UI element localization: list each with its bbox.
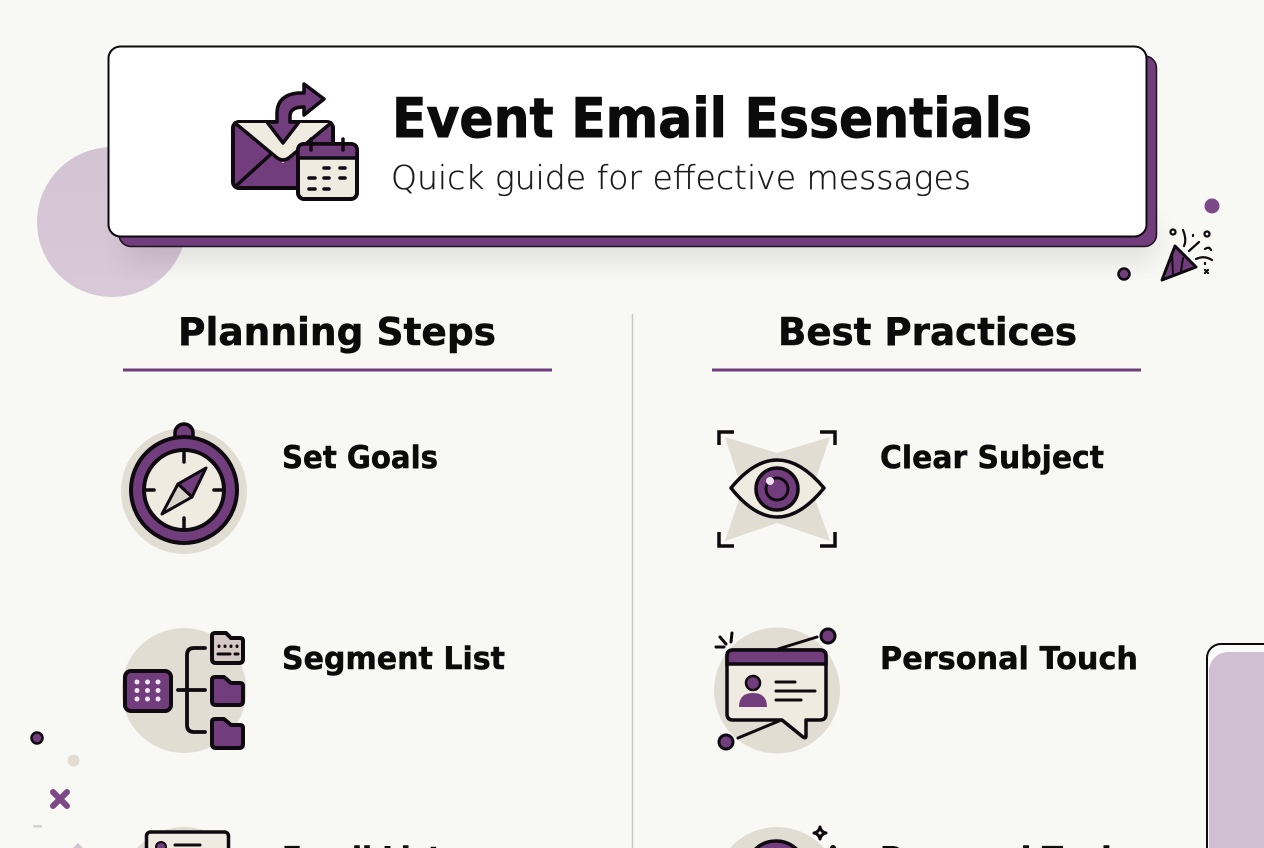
title text: Event Email Essentials <box>392 87 1032 150</box>
item: Segment List <box>122 628 505 753</box>
icon: party popper with confetti <box>1118 198 1220 280</box>
icon: segmented folders <box>122 628 246 753</box>
label: Clear Subject <box>880 440 1104 476</box>
item: Set Goals <box>121 424 438 554</box>
label: Set Goals <box>282 440 438 476</box>
item: Email List <box>121 827 442 848</box>
heading: Planning Steps: Planning Steps <box>178 310 496 354</box>
divider <box>632 314 634 848</box>
decorative lavender circle <box>37 147 187 297</box>
subtitle text: Quick guide for effective messages <box>391 158 971 197</box>
item: Clear Subject <box>719 432 1104 546</box>
side card <box>1207 644 1264 848</box>
decorative shapes bottom left <box>32 732 84 848</box>
title card <box>108 46 1156 261</box>
heading: Planning Steps <box>123 310 552 372</box>
item: Personal Tool <box>714 827 1130 848</box>
heading: Best Practices <box>712 310 1141 372</box>
icon: eye in focus frame <box>719 432 835 546</box>
item: Personal Touch <box>714 628 1138 754</box>
icon: envelope with arrow and calendar <box>233 84 357 199</box>
label: Segment List <box>282 641 505 677</box>
icon: contact card <box>121 827 247 848</box>
label: Personal Touch <box>880 641 1138 677</box>
icon: compass <box>121 424 247 554</box>
icon: purple badge with sparkle <box>714 827 840 848</box>
heading: Best Practices: Best Practices <box>778 310 1077 354</box>
icon: personal message window <box>714 628 840 754</box>
